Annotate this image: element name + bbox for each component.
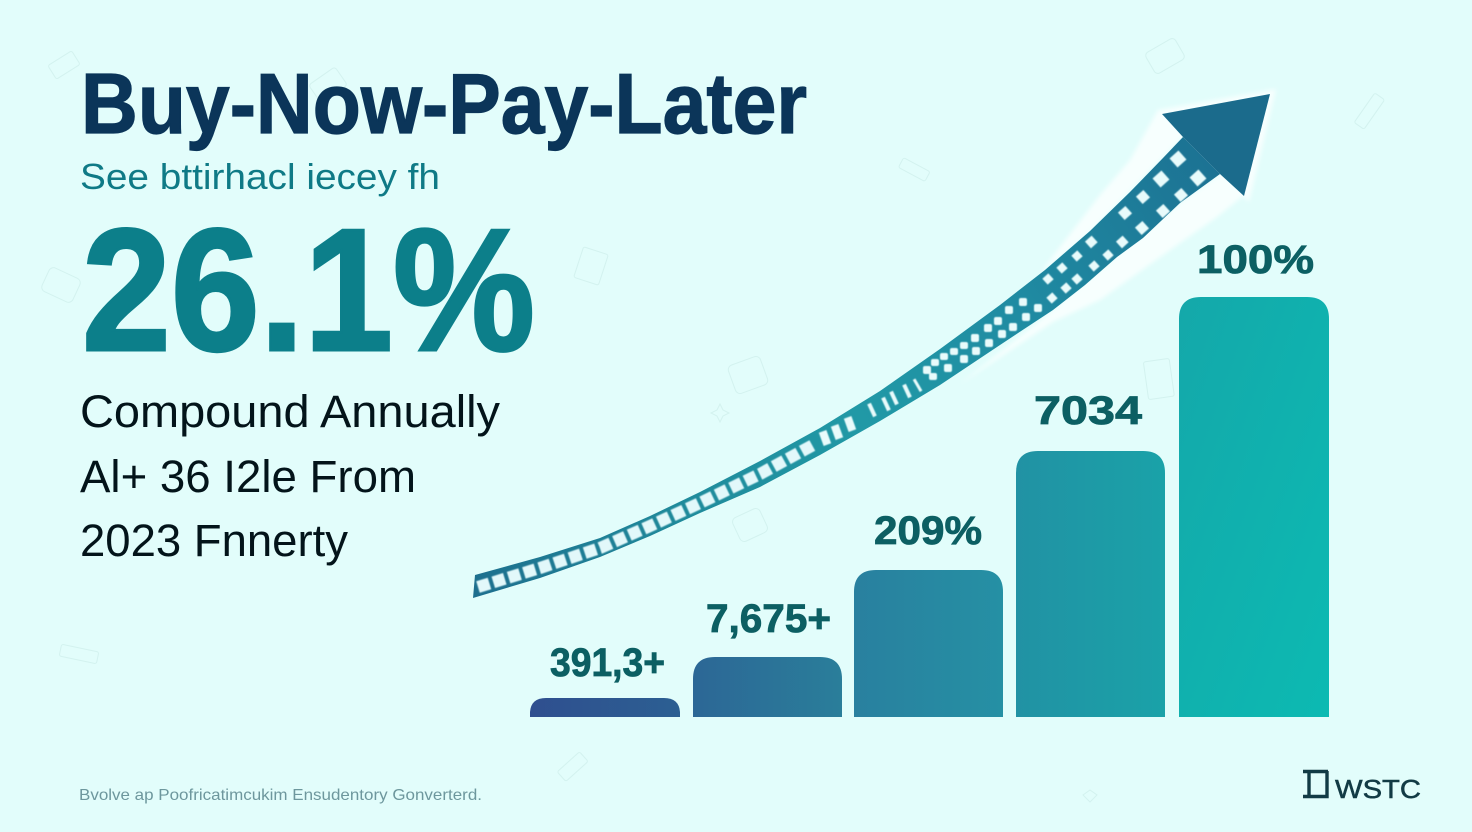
- logo mark: [1303, 771, 1328, 797]
- headline statistic: 26.1%: [82, 192, 535, 387]
- description text: Compound Annually: [80, 386, 501, 437]
- logo: [1303, 771, 1421, 804]
- description text: [80, 386, 501, 566]
- bar 5: [1179, 297, 1329, 717]
- bar 3: [854, 570, 1003, 717]
- footer note: Bvolve ap Poofricatimcukim Ensudentory Gonverterd.: [79, 787, 482, 804]
- logo wordmark: WSTC: [1335, 774, 1421, 804]
- growth arrow: [473, 89, 1276, 598]
- bar value labels: 7,675+: [706, 597, 831, 641]
- bar 1: [530, 698, 680, 717]
- bar 2: [693, 657, 842, 717]
- title: Buy-Now-Pay-Later: [81, 57, 807, 152]
- bar value labels: 391,3+: [550, 641, 665, 685]
- bar chart: [530, 297, 1329, 717]
- description text: Al+ 36 I2le From: [80, 451, 416, 502]
- bar value labels: [550, 238, 1314, 685]
- film squares: upper section: [819, 151, 1206, 446]
- arrow shaft: [473, 137, 1220, 598]
- bar 4: [1016, 451, 1165, 717]
- arrow head: [1162, 94, 1270, 196]
- description text: 2023 Fnnerty: [80, 515, 348, 566]
- bar value labels: 7034: [1034, 389, 1143, 433]
- arrow highlight: [960, 89, 1276, 384]
- film squares: lower section: [478, 444, 815, 587]
- bar value labels: 100%: [1197, 238, 1314, 282]
- subtitle: See bttirhacl iecey fh: [80, 156, 440, 197]
- bar value labels: 209%: [874, 509, 982, 553]
